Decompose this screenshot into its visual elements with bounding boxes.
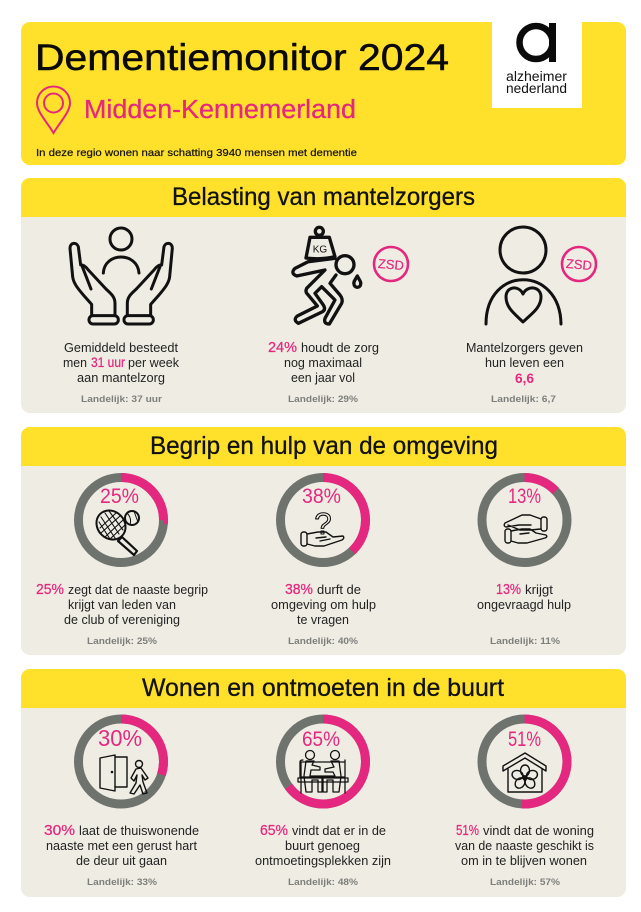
panel: Belasting van mantelzorgers <box>21 178 626 413</box>
logo: alzheimer nederland <box>492 0 582 108</box>
text: 24%: 24% <box>268 339 297 356</box>
text: 65%: buurt genoeg <box>285 838 360 853</box>
text: 24%: houdt de zorg <box>301 340 379 355</box>
text: 13%: ongevraagd hulp <box>477 597 571 612</box>
text: 38%: durft de <box>317 582 361 597</box>
text: 65% <box>255 822 391 868</box>
text: 31 uur: men <box>63 355 87 370</box>
national figure: Landelijk: 57% <box>490 877 561 888</box>
text: 31 uur <box>63 340 180 385</box>
icon: person carrying weight: KG <box>313 245 327 256</box>
donut: 65% <box>280 719 366 804</box>
panel: header <box>21 22 626 165</box>
text: 31 uur: Gemiddeld besteedt <box>64 340 178 355</box>
text: 65%: vindt dat er in de <box>292 823 386 838</box>
icon: ZSD badge: ZSD <box>377 256 405 273</box>
icon: question mark above hand: ? <box>314 506 332 541</box>
donut: 25% <box>78 478 164 562</box>
text: 31 uur: 31 uur <box>91 354 125 370</box>
national figure: Landelijk: 37 uur <box>81 394 162 405</box>
text: 6,6: hun leven een <box>485 355 564 370</box>
icon: two hands <box>504 515 547 543</box>
panel: Begrip en hulp van de omgeving <box>21 427 626 655</box>
text: 25%: zegt dat de naaste begrip <box>68 582 208 597</box>
title: Dementiemonitor 2024 <box>35 37 449 78</box>
text: 30% <box>44 822 199 868</box>
icon: person carrying weight <box>293 227 361 324</box>
heading: Belasting van mantelzorgers <box>172 183 475 211</box>
text: 25%: de club of vereniging <box>64 612 180 627</box>
text: 30%: 30% <box>44 822 75 839</box>
icon: house with flower <box>503 753 546 792</box>
icon: ZSD badge: ZSD <box>565 256 593 273</box>
text: 38% <box>271 581 376 627</box>
donut: 51%: 51% <box>508 728 541 751</box>
text: 24% <box>268 339 379 385</box>
text: 51%: van de naaste geschikt is <box>455 838 594 853</box>
text: 38%: 38% <box>285 581 313 598</box>
donut: 13%: 13% <box>508 485 541 508</box>
donut: 51% <box>482 719 567 804</box>
icon: ZSD badge <box>374 247 408 281</box>
text: 6,6: 6,6 <box>515 371 534 386</box>
text: 6,6: Mantelzorgers geven <box>466 340 583 355</box>
donut: 25%: 25% <box>100 485 139 508</box>
icon: caring hands with person <box>70 228 172 324</box>
text: 65%: ontmoetingsplekken zijn <box>255 853 391 868</box>
text: 51% <box>455 822 594 868</box>
text: 31 uur: per week <box>128 355 180 370</box>
text: 6,6 <box>466 340 583 386</box>
icon: location pin <box>37 87 70 133</box>
text: 25%: 25% <box>36 581 64 598</box>
logo: alzheimer nederland: alzheimer <box>506 68 567 84</box>
icon: two people on a bench <box>298 750 348 793</box>
donut: 30%: 30% <box>98 725 142 751</box>
donut: 65%: 65% <box>302 728 340 751</box>
text: 51%: 51% <box>456 822 479 839</box>
donut: 30% <box>78 719 164 804</box>
text: 30%: de deur uit gaan <box>76 853 167 868</box>
text: 31 uur: aan mantelzorg <box>77 370 165 385</box>
text: 65%: 65% <box>260 822 288 839</box>
text: 51%: om in te blijven wonen <box>461 853 587 868</box>
donut: 13% <box>482 478 567 562</box>
national figure: Landelijk: 33% <box>87 877 158 888</box>
intro text: In deze regio wonen naar schatting 3940 mensen met dementie <box>36 147 357 159</box>
national figure: Landelijk: 40% <box>288 636 359 647</box>
text: 13%: 13% <box>496 581 521 598</box>
panel: Wonen en ontmoeten in de buurt <box>21 669 626 897</box>
text: 38%: omgeving om hulp <box>271 597 376 612</box>
text: 13% <box>477 581 571 612</box>
text: 13%: krijgt <box>525 582 553 597</box>
text: 25%: krijgt van leden van <box>68 597 176 612</box>
national figure: Landelijk: 25% <box>87 636 158 647</box>
text: 24%: een jaar vol <box>291 370 355 385</box>
heading: Begrip en hulp van de omgeving <box>150 432 498 460</box>
logo: alzheimer nederland: nederland <box>506 80 567 96</box>
text: 38%: te vragen <box>297 612 349 627</box>
national figure: Landelijk: 48% <box>288 877 359 888</box>
region name: Midden-Kennemerland <box>84 96 356 124</box>
icon: question mark above hand <box>301 506 344 546</box>
heading: Wonen en ontmoeten in de buurt <box>142 674 504 702</box>
donut: 38% <box>280 478 366 562</box>
donut: 38%: 38% <box>302 485 341 508</box>
national figure: Landelijk: 29% <box>288 394 359 405</box>
national figure: Landelijk: 11% <box>490 636 561 647</box>
text: 24%: nog maximaal <box>284 355 362 370</box>
text: 30%: naaste met een gerust hart <box>46 838 197 853</box>
text: 51%: vindt dat de woning <box>483 823 594 838</box>
text: 25% <box>36 581 208 627</box>
national figure: Landelijk: 6,7 <box>491 394 556 405</box>
icon: tennis racket and ball <box>90 504 139 555</box>
text: 30%: laat de thuiswonende <box>79 823 199 838</box>
icon: ZSD badge <box>562 247 596 281</box>
icon: open door and walking person <box>100 755 148 794</box>
icon: person with heart <box>486 227 561 324</box>
